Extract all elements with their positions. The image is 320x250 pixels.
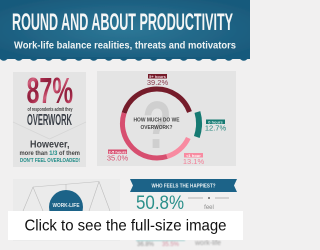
panel: overwork statistic: [13, 70, 86, 167]
ribbon heading: [130, 179, 237, 192]
faded footer details: 35.5%: [162, 242, 180, 248]
icon: question mark: ?: [142, 88, 172, 163]
label: 2-5 hours: 2-5 hours: [108, 149, 127, 154]
label: 5+ hours: 39.2%: [147, 78, 168, 87]
label: 0 hours: 0 hours: [208, 119, 223, 124]
panel: who feels the happiest: [130, 179, 237, 214]
50.8 percent: 50.8%: [136, 192, 184, 214]
panel: how much do we overwork: OVERWORK?: [140, 125, 172, 131]
label: under 1 hour: 13.1%: [183, 157, 204, 166]
caption bar: Click to see the full-size image: [24, 218, 227, 234]
87% figure: 87%: [26, 70, 73, 111]
panel: work-life balance scale: WORK-LIFE: [52, 203, 80, 209]
faded footer details: work-life: [194, 240, 221, 247]
donut center label: HOW MUCH DO WE: [134, 118, 180, 124]
header banner: [0, 0, 255, 61]
label: 0 hours: [205, 119, 226, 132]
faded footer details: [136, 240, 221, 248]
label: under 1 hour: [183, 153, 204, 166]
faded footer details: 36.8%: [137, 242, 155, 248]
label: 5+ hours: [147, 74, 168, 87]
however: However,: [30, 138, 70, 150]
scale beam and arms: [23, 182, 110, 211]
divider with dot: [188, 197, 229, 199]
feel label: feel: [204, 205, 214, 211]
respondents caption: of respondents admit they: [28, 107, 73, 113]
label: 5+ hours: 5+ hours: [149, 74, 167, 79]
one third line: more than 1/3 of them: [20, 151, 80, 157]
panel: how much do we overwork: [97, 71, 236, 166]
panel: work-life balance scale: [13, 179, 120, 241]
donut chart: [122, 89, 199, 158]
work-life balance circle: [49, 190, 83, 224]
label: 2-5 hours: [107, 149, 128, 162]
label: 0 hours: 12.7%: [205, 124, 226, 132]
panel: overwork statistic: OVERWORK: [27, 112, 72, 129]
label: 2-5 hours: 35.0%: [107, 154, 128, 162]
not overloaded line: DON'T FEEL OVERLOADED!: [20, 158, 80, 164]
caption bar: [8, 211, 243, 240]
label: under 1 hour: <1 hour: [186, 153, 201, 158]
panel: who feels the happiest: WHO FEELS THE HAPPIEST?: [152, 184, 216, 190]
